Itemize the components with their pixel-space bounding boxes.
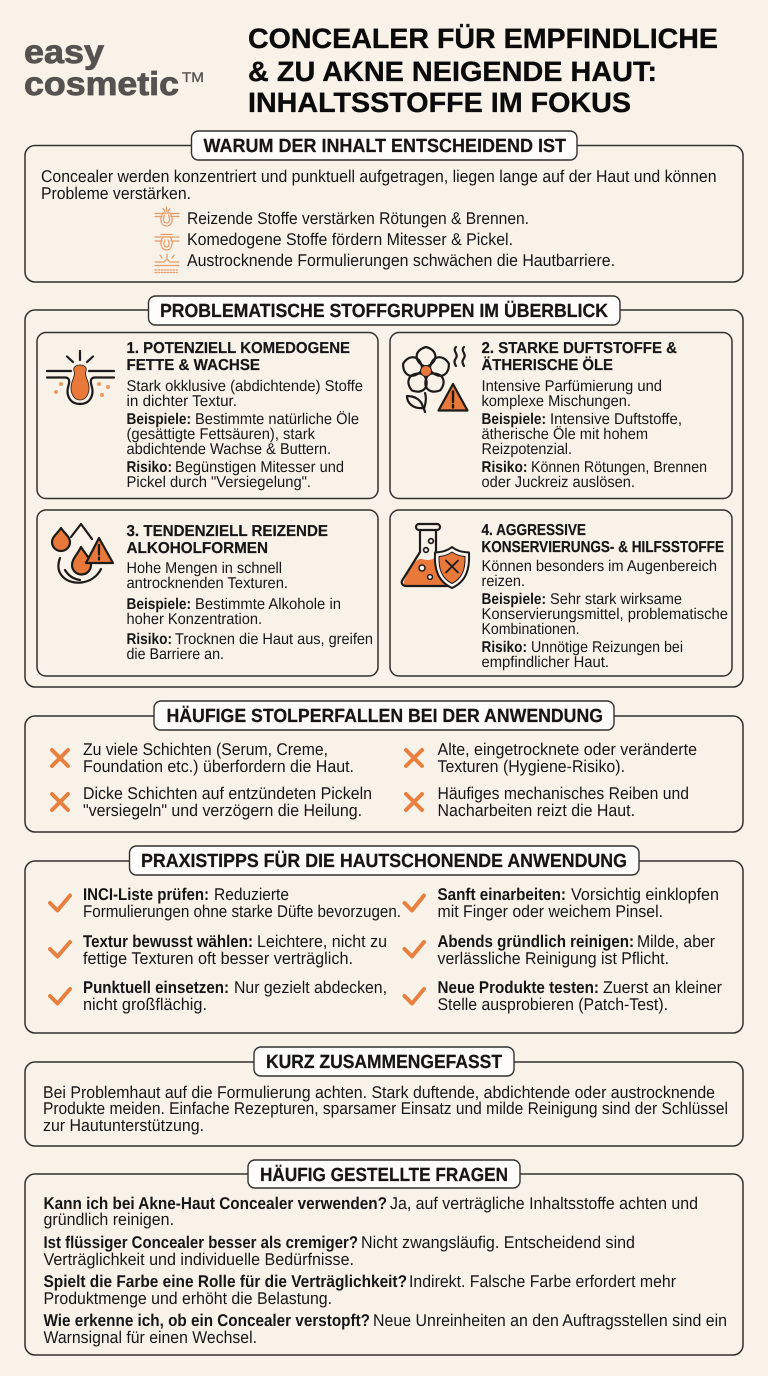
card 1 heading: 1. POTENZIELL KOMEDOGENE — [126, 340, 350, 357]
tip: neue produkte: Zuerst an kleiner — [603, 978, 722, 997]
title: INHALTSSTOFFE IM FOKUS — [248, 87, 631, 118]
card 1 heading — [126, 340, 350, 374]
tip: abends reinigen: verlässliche Reinigung ist Pflicht. — [438, 949, 669, 968]
summary text: zur Hautunterstützung. — [43, 1116, 204, 1135]
card 2 text: Intensive Parfümierung und — [482, 378, 662, 395]
pitfall: dicke schichten: "versiegeln" und verzögern die Heilung. — [83, 801, 362, 820]
card 4 text: Konservierungsmittel, problematische — [482, 606, 728, 623]
icon: dry skin barrier — [155, 254, 179, 272]
panel: haeufige stolperfallen — [25, 701, 743, 832]
faq 2: Verträglichkeit und individuelle Bedürfnisse. — [44, 1250, 354, 1269]
card 3 text: Trocknen die Haut aus, greifen — [175, 631, 373, 648]
card 1 text: (gesättigte Fettsäuren), stark — [126, 426, 315, 443]
card 4 text: Unnötige Reizungen bei — [531, 639, 683, 656]
faq 4: Wie erkenne ich, ob ein Concealer verstopft? — [44, 1311, 370, 1330]
tip: neue produkte: Neue Produkte testen: — [438, 978, 599, 997]
logo: cosmetic — [24, 65, 179, 102]
icon: cross 3 — [406, 750, 422, 766]
card 3 text: die Barriere an. — [126, 646, 224, 663]
tip: inci-liste: INCI-Liste prüfen: — [83, 885, 209, 904]
card 4 heading: 4. AGGRESSIVE — [482, 522, 586, 539]
tip: inci-liste: Formulierungen ohne starke Düfte bevorzugen. — [83, 902, 401, 921]
heading: praxistipps: PRAXISTIPPS FÜR DIE HAUTSCHONENDE ANWENDUNG — [141, 850, 627, 872]
icon: check 5 — [404, 942, 424, 956]
card 2: duftstoffe und aetherische oele — [390, 332, 732, 498]
tip: inci-liste — [83, 885, 401, 921]
tip: punktuell: Punktuell einsetzen: — [83, 978, 229, 997]
card 2 text: Risiko: — [482, 459, 528, 476]
card 3 text: hoher Konzentration. — [126, 611, 262, 628]
card 1 text — [126, 378, 363, 491]
card 1 heading: FETTE & WACHSE — [126, 357, 260, 374]
icon: clogged follicle — [47, 351, 114, 404]
intro text: Probleme verstärken. — [41, 184, 191, 203]
heading: zusammenfassung: KURZ ZUSAMMENGEFASST — [266, 1052, 502, 1073]
faq 1: gründlich reinigen. — [44, 1210, 174, 1229]
icon: check 2 — [50, 942, 70, 956]
icon: flower with warning — [400, 347, 468, 412]
tip: punktuell: Nur gezielt abdecken, — [234, 978, 387, 997]
card 4 text: empfindlicher Haut. — [482, 654, 609, 671]
card 1 text: Begünstigen Mitesser und — [175, 459, 344, 476]
card 1 text: in dichter Textur. — [126, 393, 237, 410]
card 2 heading — [482, 340, 677, 374]
pitfall: dicke schichten — [83, 784, 372, 820]
list item: austrocknende formulierungen: Austrocknende Formulierungen schwächen die Hautbarriere. — [187, 251, 615, 270]
faq 4: Neue Unreinheiten an den Auftragsstellen sind ein — [373, 1311, 727, 1330]
faq 2: Ist flüssiger Concealer besser als cremiger? — [44, 1233, 358, 1252]
tip: textur — [83, 932, 387, 968]
pitfall: zu viele schichten: Foundation etc.) überfordern die Haut. — [83, 757, 354, 776]
icon: cross 4 — [406, 794, 422, 810]
tip: sanft einarbeiten: Sanft einarbeiten: — [438, 885, 566, 904]
card 1 text: Bestimmte natürliche Öle — [195, 410, 359, 428]
intro text — [41, 167, 716, 203]
card 4 text: Beispiele: — [482, 591, 546, 608]
card 2 text: oder Juckreiz auslösen. — [482, 474, 635, 491]
title: & ZU AKNE NEIGENDE HAUT: — [248, 56, 657, 87]
pitfall: alte texturen: Texturen (Hygiene-Risiko). — [438, 757, 625, 776]
pitfall: dicke schichten: Dicke Schichten auf entzündeten Pickeln — [83, 784, 372, 803]
card 3 text: Hohe Mengen in schnell — [126, 560, 282, 577]
title — [248, 23, 718, 118]
panel: problematische stoffgruppen — [25, 296, 743, 687]
card 2 text: Beispiele: — [482, 411, 546, 428]
tip: punktuell: nicht großflächig. — [83, 995, 207, 1014]
intro text: Concealer werden konzentriert und punktuell aufgetragen, liegen lange auf der Haut und können — [41, 167, 716, 186]
card 4 text: Sehr stark wirksame — [550, 591, 682, 608]
card 4: konservierungs- und hilfsstoffe — [390, 510, 732, 676]
icon: irritated pore — [155, 207, 179, 226]
card 2 text: Intensive Duftstoffe, — [550, 411, 682, 428]
card 1 text: Risiko: — [126, 459, 172, 476]
tip: abends reinigen — [438, 932, 715, 968]
tip: sanft einarbeiten — [438, 885, 719, 921]
pitfall: zu viele schichten — [83, 740, 354, 776]
panel: haeufig gestellte fragen — [25, 1160, 743, 1355]
faq 3: Produktmenge und erhöht die Belastung. — [44, 1289, 332, 1308]
heading: fragen: HÄUFIG GESTELLTE FRAGEN — [260, 1164, 508, 1186]
heading: stolperfallen: HÄUFIGE STOLPERFALLEN BEI DER ANWENDUNG — [166, 705, 603, 727]
card 3 heading: ALKOHOLFORMEN — [126, 540, 268, 557]
card 3 text: Bestimmte Alkohole in — [195, 596, 341, 613]
list item: reizende stoffe: Reizende Stoffe verstärken Rötungen & Brennen. — [187, 209, 529, 228]
title: CONCEALER FÜR EMPFINDLICHE — [248, 23, 718, 54]
tip: sanft einarbeiten: mit Finger oder weichem Pinsel. — [438, 902, 663, 921]
card 2 text — [482, 378, 707, 491]
panel: kurz zusammengefasst — [25, 1047, 743, 1146]
tip: neue produkte: Stelle ausprobieren (Patch-Test). — [438, 995, 668, 1014]
card 3 text: Beispiele: — [126, 596, 191, 613]
card 2 text: ätherische Öle mit hohem — [482, 425, 648, 443]
tip: punktuell — [83, 978, 387, 1014]
card 3 text — [126, 560, 373, 663]
icon: cross 1 — [52, 750, 68, 766]
logo — [24, 33, 204, 102]
card 4 text: reizen. — [482, 573, 525, 590]
pitfall: mechanisches reiben: Häufiges mechanisches Reiben und — [438, 784, 689, 803]
card 4 text: Können besonders im Augenbereich — [482, 558, 717, 575]
summary text: Bei Problemhaut auf die Formulierung achten. Stark duftende, abdichtende oder austrocknende — [43, 1083, 715, 1102]
heading: warum: WARUM DER INHALT ENTSCHEIDEND IST — [204, 136, 566, 157]
tip: textur: Textur bewusst wählen: — [83, 932, 253, 951]
logo: TM — [182, 69, 204, 85]
tip: abends reinigen: Abends gründlich reinigen: — [438, 932, 634, 951]
faq 1 — [44, 1194, 698, 1229]
panel: praxistipps — [25, 846, 743, 1033]
card 3 text: antrocknenden Texturen. — [126, 575, 288, 592]
faq 1: Kann ich bei Akne-Haut Concealer verwenden? — [44, 1194, 387, 1213]
faq 1: Ja, auf verträgliche Inhaltsstoffe achten und — [390, 1194, 698, 1213]
panel: warum der inhalt entscheidend ist — [25, 131, 743, 282]
card 4 text — [482, 558, 728, 671]
card 1 text: Stark okklusive (abdichtende) Stoffe — [126, 378, 363, 395]
pitfall: alte texturen — [438, 740, 697, 776]
tip: textur: fettige Texturen oft besser verträglich. — [83, 949, 353, 968]
faq 4 — [44, 1311, 727, 1347]
card 3 text: Risiko: — [126, 631, 172, 648]
card 4 text: Kombinationen. — [482, 621, 580, 638]
card 2 text: Reizpotenzial. — [482, 441, 572, 458]
card 4 heading: KONSERVIERUNGS- & HILFSSTOFFE — [482, 539, 724, 556]
card 1 text: Pickel durch "Versiegelung". — [126, 474, 311, 491]
faq 3: Indirekt. Falsche Farbe erfordert mehr — [409, 1272, 676, 1291]
card 3: reizende alkoholformen — [37, 510, 378, 676]
faq 3 — [44, 1272, 676, 1308]
icon: drops with warning — [52, 524, 113, 583]
faq 2 — [44, 1233, 635, 1269]
card 4 text: Risiko: — [482, 639, 527, 656]
faq 4: Warnsignal für einen Wechsel. — [44, 1328, 257, 1347]
pitfall: mechanisches reiben: Nacharbeiten reizt die Haut. — [438, 801, 635, 820]
card 3 heading: 3. TENDENZIELL REIZENDE — [126, 523, 328, 540]
faq 3: Spielt die Farbe eine Rolle für die Verträglichkeit? — [44, 1272, 407, 1291]
card 4 heading — [482, 522, 724, 556]
card 2 text: Können Rötungen, Brennen — [531, 459, 707, 476]
tip: sanft einarbeiten: Vorsichtig einklopfen — [571, 885, 719, 904]
tip: inci-liste: Reduzierte — [214, 885, 289, 904]
summary text — [43, 1083, 728, 1135]
icon: cross 2 — [52, 794, 68, 810]
icon: check 4 — [404, 896, 424, 910]
pitfall: mechanisches reiben — [438, 784, 689, 820]
icon: flask with shield — [402, 524, 469, 588]
card 2 heading: ÄTHERISCHE ÖLE — [482, 356, 613, 374]
pitfall: alte texturen: Alte, eingetrocknete oder veränderte — [438, 740, 697, 759]
card 2 heading: 2. STARKE DUFTSTOFFE & — [482, 340, 677, 357]
list item: komedogene stoffe: Komedogene Stoffe fördern Mitesser & Pickel. — [187, 230, 513, 249]
tip: neue produkte — [438, 978, 722, 1014]
card 1 text: Beispiele: — [126, 411, 191, 428]
tip: textur: Leichtere, nicht zu — [257, 932, 387, 951]
pitfall: zu viele schichten: Zu viele Schichten (Serum, Creme, — [83, 740, 328, 759]
tip: abends reinigen: Milde, aber — [637, 932, 715, 951]
icon: check 1 — [50, 896, 70, 910]
card 2 text: komplexe Mischungen. — [482, 393, 631, 410]
logo: easy — [24, 33, 105, 70]
icon: check 6 — [404, 989, 424, 1004]
icon: check 3 — [50, 989, 70, 1004]
heading: stoffgruppen: PROBLEMATISCHE STOFFGRUPPEN IM ÜBERBLICK — [160, 300, 608, 322]
faq 2: Nicht zwangsläufig. Entscheidend sind — [361, 1233, 635, 1252]
card 1 text: abdichtende Wachse & Buttern. — [126, 441, 331, 458]
icon: clogged pore — [155, 234, 179, 250]
card 3 heading — [126, 523, 328, 557]
card 1: komedogene fette und wachse — [37, 332, 378, 498]
